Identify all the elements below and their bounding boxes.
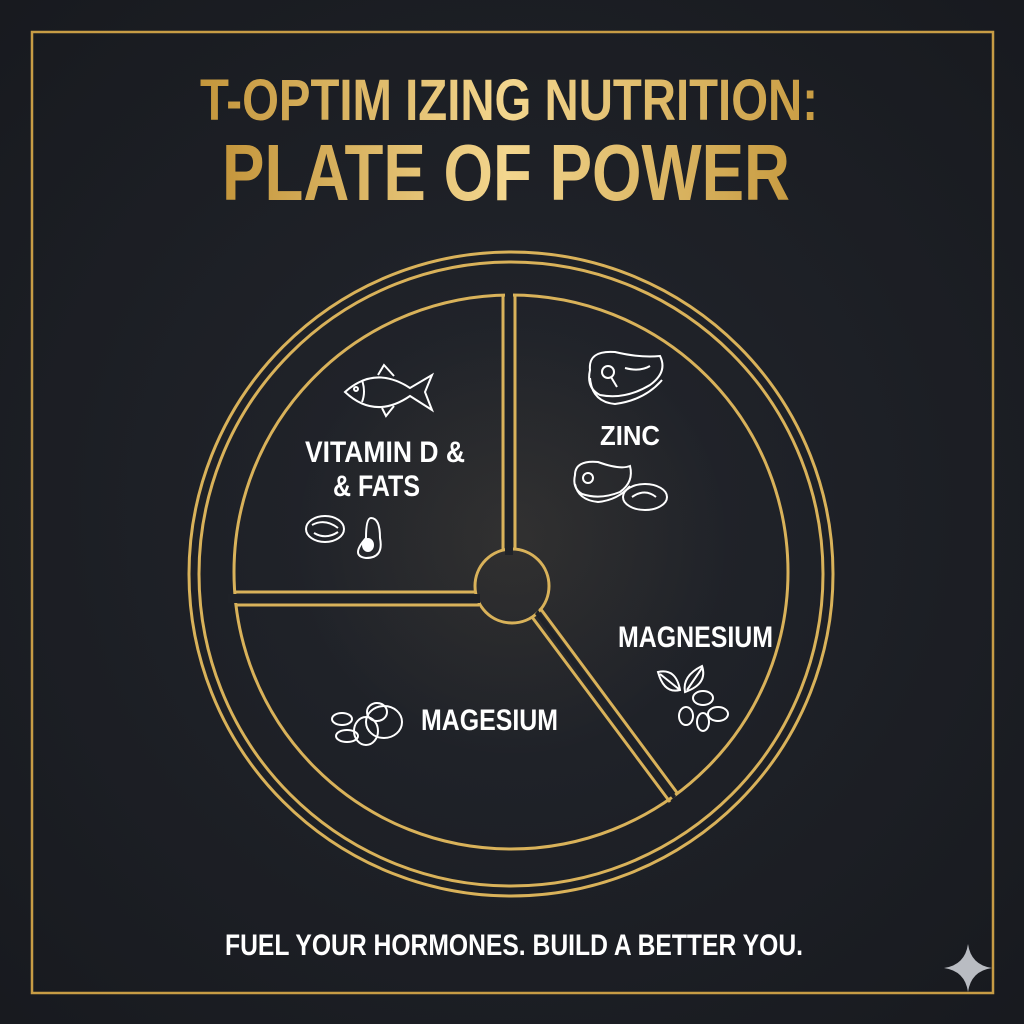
label: magesium: MAGESIUM: [421, 704, 558, 737]
plate: [189, 252, 833, 896]
icon: sparkle: [944, 944, 992, 992]
icon: steak and oyster: [574, 462, 667, 510]
label: zinc: ZINC: [600, 420, 660, 451]
label: vitamin d & fats: [305, 436, 465, 503]
label: vitamin d & fats: VITAMIN D &: [305, 436, 465, 469]
label: vitamin d & fats: & FATS: [333, 470, 420, 503]
title: PLATE OF POWER: [222, 128, 790, 217]
masks for divider gaps: [228, 290, 513, 603]
icon: leaves and nuts: [658, 666, 728, 731]
icon: fish: [345, 365, 432, 416]
icon: beans: [332, 703, 402, 745]
label: magnesium: MAGNESIUM: [618, 621, 773, 654]
footer tagline: FUEL YOUR HORMONES. BUILD A BETTER YOU.: [225, 929, 803, 962]
title: T-OPTIM IZING NUTRITION:: [200, 68, 818, 133]
icon: steak: [589, 352, 662, 404]
title: [200, 68, 818, 217]
dividers: [234, 296, 678, 802]
icon: salmon steak and avocado: [306, 516, 381, 558]
